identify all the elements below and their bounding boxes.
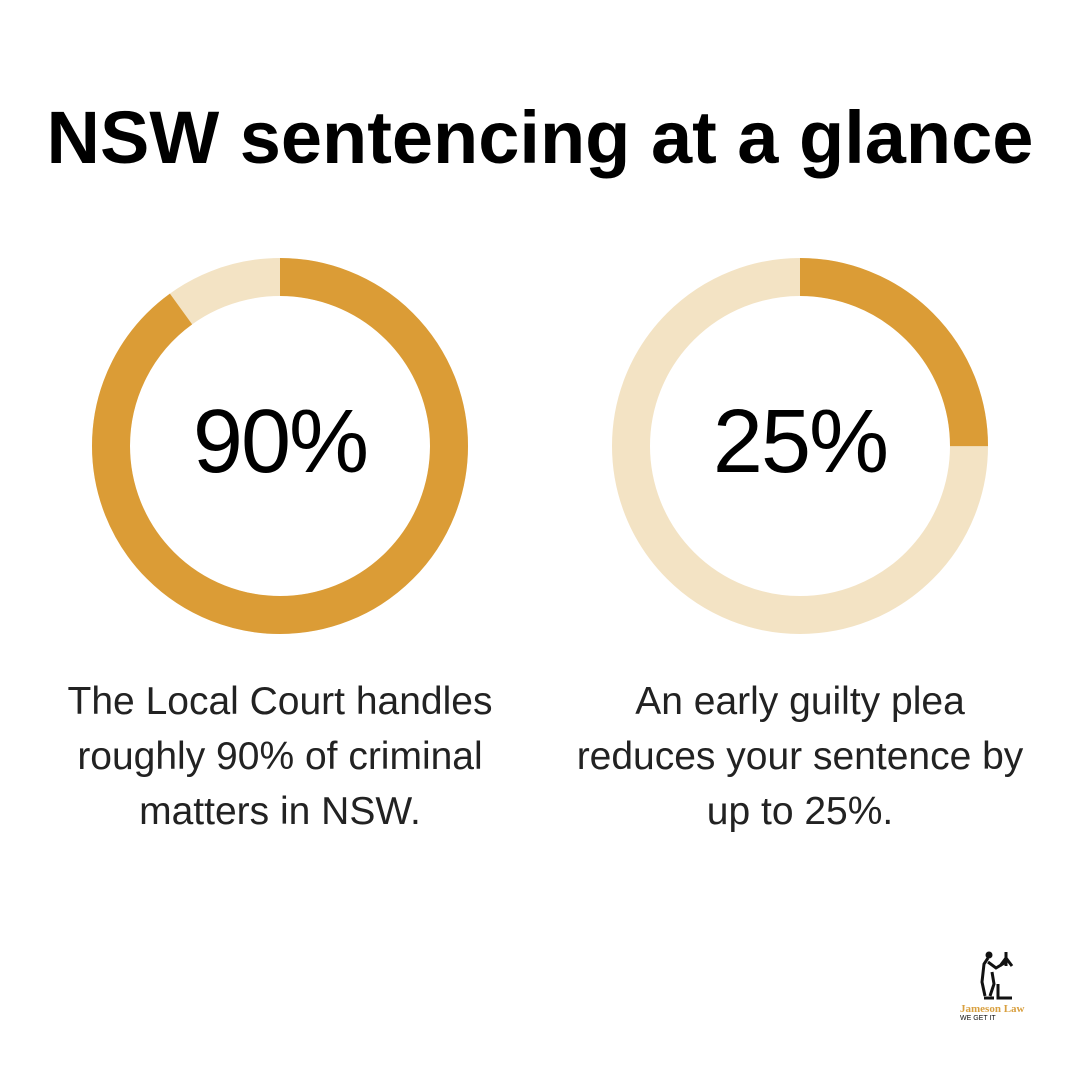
- donut: 90%: [111, 277, 449, 615]
- caption left: matters in NSW.: [139, 790, 421, 833]
- logo: [960, 952, 1024, 1022]
- caption right: up to 25%.: [707, 790, 893, 833]
- caption right: An early guilty plea: [635, 680, 965, 723]
- donut: 25%: [631, 277, 969, 615]
- donut: 25%: 25%: [713, 392, 887, 492]
- logo: WE GET IT: [960, 1015, 996, 1022]
- caption right: reduces your sentence by: [577, 735, 1023, 778]
- logo: Jameson Law: [960, 1003, 1024, 1015]
- caption left: roughly 90% of criminal: [77, 735, 483, 778]
- title: NSW sentencing at a glance: [47, 96, 1033, 179]
- caption right: [577, 680, 1024, 833]
- donut: 90%: 90%: [193, 392, 367, 492]
- caption left: The Local Court handles: [68, 680, 492, 723]
- caption left: [68, 680, 492, 833]
